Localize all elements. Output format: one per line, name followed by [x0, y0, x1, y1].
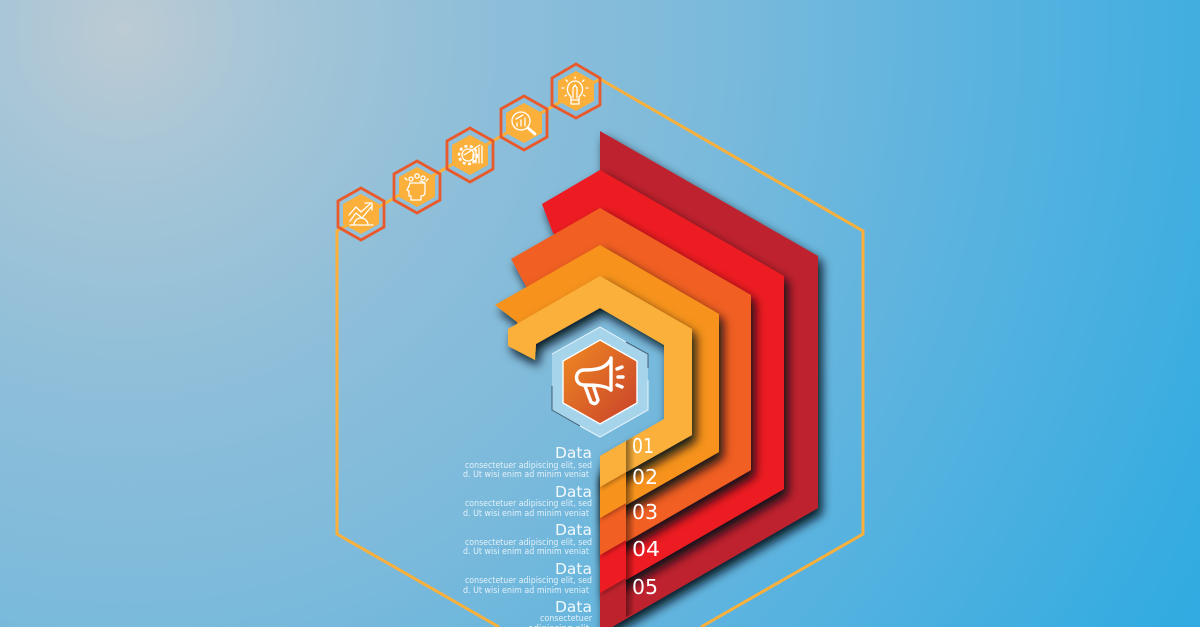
data block 4: consectetuer adipiscing elit, sed — [465, 575, 592, 585]
icon: megaphone — [576, 358, 623, 404]
hexagon fill — [343, 194, 379, 234]
hexagon ring — [552, 64, 600, 118]
badge outer hexagon — [552, 327, 648, 437]
central badge — [552, 327, 648, 437]
icon: gear with bars — [459, 145, 482, 164]
data block 5: consectetuer — [540, 613, 593, 623]
band 1: yellow — [508, 276, 692, 487]
data block 2 — [463, 483, 592, 518]
hexagon fill — [452, 135, 488, 175]
data block 2: consectetuer adipiscing elit, sed — [465, 498, 592, 508]
band 5: dark red — [600, 131, 818, 627]
number 01: 01 — [632, 434, 654, 458]
data block 1: consectetuer adipiscing elit, sed — [465, 460, 592, 470]
data block 3: d. Ut wisi enim ad minim veniat — [463, 546, 590, 556]
data block 4 — [463, 560, 592, 595]
data block 3: consectetuer adipiscing elit, sed — [465, 537, 592, 547]
small hexagon 2 — [394, 161, 440, 213]
number 03: 03 — [632, 500, 658, 524]
small hexagon 5 — [552, 64, 600, 118]
band 4: red — [542, 170, 784, 595]
small hexagon 4 — [501, 96, 547, 150]
left strips of the bands — [600, 441, 626, 606]
data block 5 — [528, 598, 593, 627]
outer hexagon outline — [337, 79, 863, 627]
hexagon ring — [338, 188, 384, 240]
data block 2: Data — [555, 483, 592, 501]
data block 1: Data — [555, 444, 592, 462]
badge bevel edges — [552, 327, 648, 437]
band 2: orange — [495, 245, 719, 520]
data block 5: Data — [555, 598, 592, 616]
hexagon ring — [394, 161, 440, 213]
data block 1 — [463, 444, 592, 479]
strip shadow — [626, 436, 635, 617]
number 02: 02 — [632, 465, 658, 489]
data block 1: d. Ut wisi enim ad minim veniat — [463, 469, 590, 479]
small hexagon 3 — [447, 128, 493, 182]
number 05: 05 — [632, 575, 658, 599]
badge orange hexagon — [563, 340, 637, 424]
hexagon ring — [501, 96, 547, 150]
icon: growth arrow and gear — [349, 203, 373, 225]
hexagon fill — [558, 71, 594, 111]
data block 2: d. Ut wisi enim ad minim veniat — [463, 508, 590, 518]
hexagon fill — [399, 167, 435, 207]
number 04: 04 — [632, 537, 660, 561]
band 3: orange-red — [511, 208, 751, 557]
icon: magnifier with chart — [512, 112, 535, 134]
data block 3: Data — [555, 521, 592, 539]
data block 4: d. Ut wisi enim ad minim veniat — [463, 585, 590, 595]
data block 4: Data — [555, 560, 592, 578]
icon: head with ideas — [405, 174, 428, 200]
hexagon fill — [506, 103, 542, 143]
data block 3 — [463, 521, 592, 556]
icon: bulb with pencil — [562, 77, 588, 104]
small hexagon 1 — [338, 188, 384, 240]
hexagon ring — [447, 128, 493, 182]
